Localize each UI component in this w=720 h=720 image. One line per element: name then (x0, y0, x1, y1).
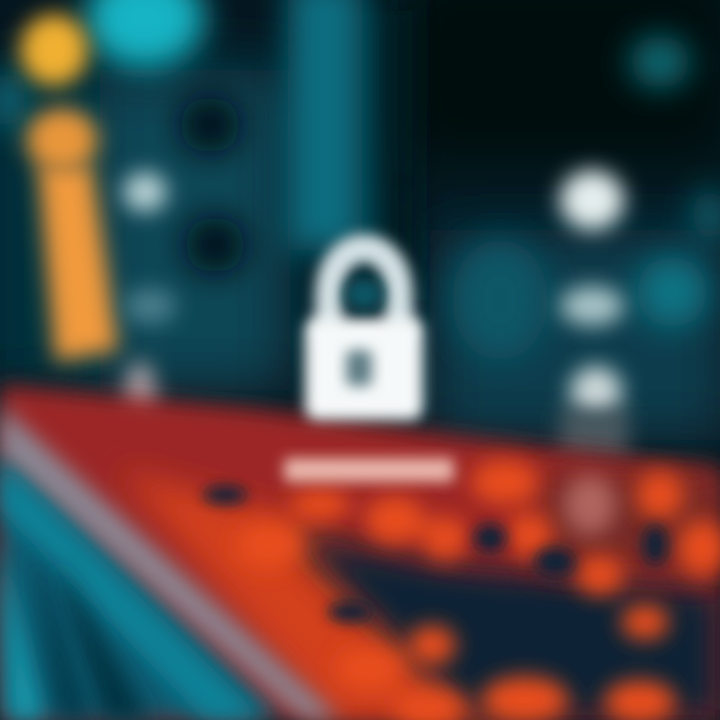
teal tower (288, 0, 412, 300)
orange-red diagonal band (120, 470, 520, 720)
padlock opening (344, 277, 384, 311)
dark windows (180, 97, 245, 273)
red floor (0, 385, 720, 720)
blurred label under padlock (284, 458, 454, 482)
left white glowing icons (123, 172, 176, 524)
glow: cyan top (85, 0, 205, 68)
padlock keyhole (346, 350, 372, 386)
glow: teal blobs on right (0, 36, 720, 360)
orange keyboard keys (236, 460, 720, 720)
dark lower-right floor (285, 530, 720, 720)
dark key gaps (203, 486, 667, 622)
pink highlight on floor (564, 475, 616, 535)
padlock (305, 248, 423, 420)
background: city buildings (0, 0, 720, 440)
padlock body (305, 318, 423, 420)
padlock shackle (329, 248, 399, 335)
bottom-left teal light streaks (0, 405, 340, 720)
neon sign: yellow and orange column (20, 14, 118, 362)
right white glowing icons (560, 170, 628, 460)
